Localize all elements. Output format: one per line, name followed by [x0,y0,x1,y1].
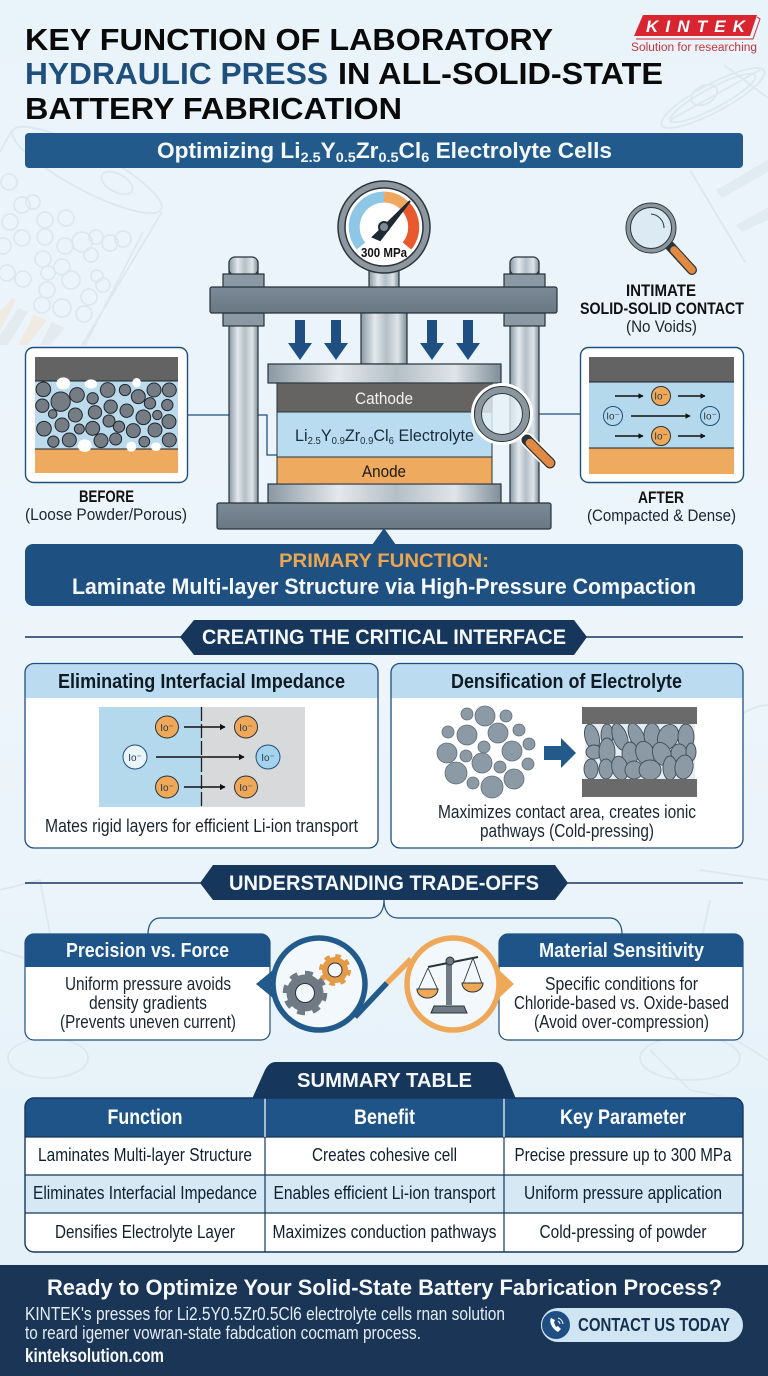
table tab heading: SUMMARY TABLE [297,1070,472,1092]
cathode layer [277,383,492,412]
callout: intimate solid-solid contact: INTIMATE [626,281,696,300]
icon: magnifying glass [626,203,692,270]
subtitle banner: Optimizing Li [157,138,296,163]
anode layer [277,457,492,484]
table rows [33,1145,732,1242]
icon: gears [286,956,348,1012]
table rows: Densifies Electrolyte Layer [55,1222,235,1242]
body text: (Avoid over-compression) [534,1012,709,1032]
logo: KINTEK [631,15,760,54]
table rows: Cold-pressing of powder [540,1222,706,1242]
anode layer: Anode [362,462,406,481]
heading: Densification of Electrolyte [451,671,682,693]
summary table [25,1062,743,1252]
electrolyte layer: Electrolyte [394,426,474,445]
subtitle banner [25,133,743,168]
footer text: to reard iɡemer vowran-state fabdcation cocmam process. [25,1323,421,1343]
ram [361,313,407,364]
body text: (Prevents uneven current) [60,1012,236,1032]
callout: intimate solid-solid contact: (No Voids) [626,317,697,336]
body text: density gradients [89,993,207,1013]
primary function banner: Laminate Multi-layer Structure via High-Pressure Compaction [72,574,696,599]
before caption [25,487,187,524]
panel: after: Io⁻ [703,412,717,422]
electrolyte layer: 0.9 [332,436,345,447]
table tab heading [252,1062,516,1099]
right column [504,257,545,504]
footer heading: Ready to Optimize Your Solid-State Battery Fabrication Process? [47,1275,722,1300]
caption [438,802,696,841]
after caption [587,488,736,525]
title: KEY FUNCTION OF LABORATORY [25,22,553,57]
contact button: CONTACT US TODAY [578,1315,730,1335]
caption: Maximizes contact area, creates ionic [438,802,696,822]
before caption: BEFORE [79,487,134,506]
subtitle banner: 6 [421,149,429,165]
title: BATTERY FABRICATION [25,91,402,126]
table rows: Uniform pressure application [524,1183,722,1203]
primary function banner: PRIMARY FUNCTION: [279,551,489,572]
subtitle banner: Y [321,138,336,163]
section heading: understanding trade-offs [25,865,743,900]
electrolyte layer: 2.5 [308,436,321,447]
panel: before [25,348,188,524]
section heading: understanding trade-offs: UNDERSTANDING TRADE-OFFS [229,872,539,895]
title: HYDRAULIC PRESS [25,56,328,91]
ion transport diagram: Io⁻ [261,753,275,764]
panel: densification of electrolyte [391,664,743,848]
left column [223,257,264,504]
heading: Material Sensitivity [539,940,705,962]
panel: material sensitivity [499,934,743,1040]
electrolyte layer: Y [321,426,332,445]
table rows: Eliminates Interfacial Impedance [33,1183,257,1203]
cathode layer: Cathode [355,389,413,408]
panel: eliminating interfacial impedance [25,664,378,848]
table rows: Enables efficient Li-ion transport [274,1183,496,1203]
electrolyte layer [277,412,492,457]
body text: Chloride-based vs. Oxide-based [514,993,729,1013]
table header: Benefit [354,1106,415,1129]
pressure gauge: 300 MPa [338,181,430,273]
heading: Eliminating Interfacial Impedance [58,671,345,693]
compacted particles [582,707,697,797]
magnifier on stack [472,384,550,463]
panel: after [580,348,744,525]
section heading: creating the critical interface: CREATING THE CRITICAL INTERFACE [202,626,566,649]
after caption: AFTER [638,488,684,507]
hydraulic press diagram [210,181,557,529]
website: kinteksolution.com [25,1346,164,1367]
subtitle banner: 2.5 [301,149,321,165]
body text [60,974,236,1032]
panel: after: Io⁻ [654,392,668,402]
panel: after: Io⁻ [606,412,620,422]
ion transport diagram: Io⁻ [239,723,253,734]
electrolyte layer: Cl [373,426,389,445]
section heading: creating the critical interface [25,620,743,655]
table rows: Precise pressure up to 300 MPa [514,1145,732,1165]
footer text: KINTEK's presses for Li2.5Y0.5Zr0.5Cl6 electrolyte cells rnan solution [25,1304,505,1324]
caption: pathways (Cold-pressing) [480,821,654,841]
loose particles [437,706,535,798]
table rows: Creates cohesive cell [312,1145,457,1165]
ion transport diagram: Io⁻ [239,783,253,794]
ion transport diagram: Io⁻ [160,723,174,734]
icon: balance scale [417,957,483,1013]
title: IN ALL-SOLID-STATE [338,56,663,91]
footer [0,1265,768,1376]
lower platen [268,484,501,503]
logo: KINTEK: KINTEK [646,17,747,36]
ion transport diagram [99,707,305,807]
electrolyte layer: 6 [389,436,394,447]
subtitle banner: Cl [399,138,421,163]
subtitle banner: 0.5 [336,149,356,165]
body text: Specific conditions for [545,974,698,994]
pressure gauge: 300 MPa: 300 MPa [361,246,408,260]
panel: after: Io⁻ [654,432,668,442]
before caption: (Loose Powder/Porous) [25,505,187,524]
table header: Key Parameter [560,1106,686,1129]
table header [108,1106,686,1129]
table header: Function [108,1106,182,1129]
contact button [541,1308,743,1342]
arrow [544,738,576,768]
callout: intimate solid-solid contact [580,281,745,336]
top plate [210,287,557,313]
caption: Mates rigid layers for efficient Li-ion transport [45,816,358,836]
pressure arrows [288,320,480,360]
ion transport diagram: Io⁻ [160,783,174,794]
title [25,22,663,126]
electrolyte layer: Li [295,426,308,445]
subtitle banner: Electrolyte Cells [429,138,612,163]
heading: Precision vs. Force [66,940,229,962]
panel: precision vs force [25,934,270,1040]
subtitle banner: 0.5 [379,149,399,165]
electrolyte layer: 0.9 [360,436,374,447]
body text: Uniform pressure avoids [65,974,231,994]
table rows: Maximizes conduction pathways [272,1222,496,1242]
body text [514,974,729,1032]
ion transport diagram: Io⁻ [128,753,142,764]
upper platen [268,364,501,383]
after caption: (Compacted & Dense) [587,506,736,525]
electrolyte layer: Zr [345,426,360,445]
base plate [217,503,551,529]
footer text [25,1304,505,1343]
trade-off loop connector [256,938,514,1030]
subtitle banner: Zr [356,138,379,163]
table rows: Laminates Multi-layer Structure [38,1145,252,1165]
primary function banner [25,528,743,606]
logo: KINTEK: Solution for researching [631,42,757,54]
